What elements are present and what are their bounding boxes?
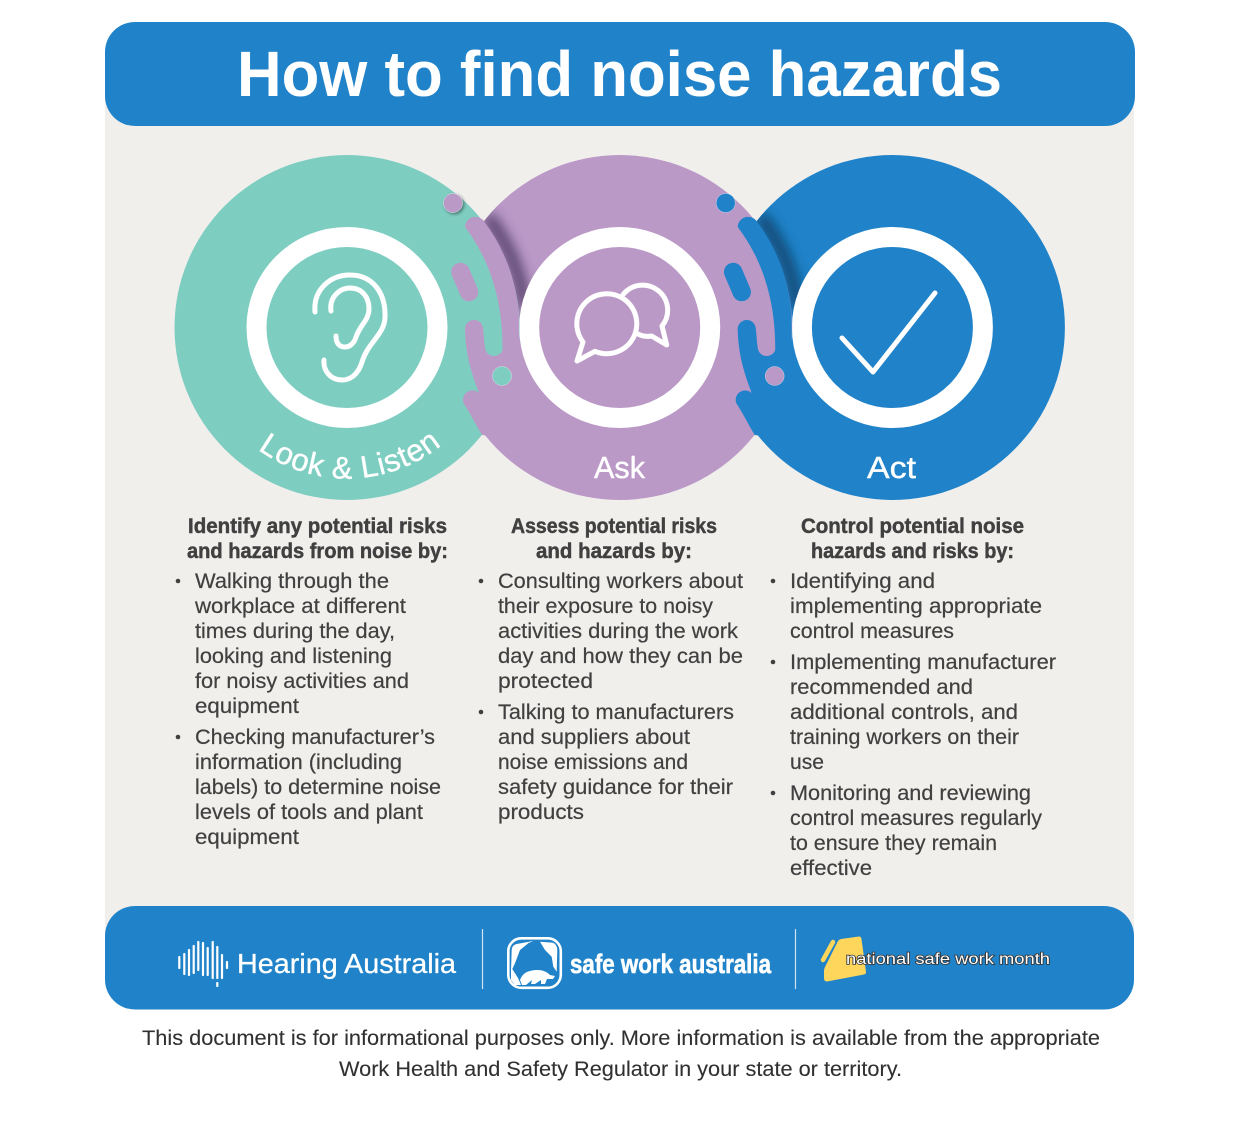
purple pill — [460, 272, 469, 292]
bullet: walking — [176, 570, 409, 718]
label: Ask: Ask — [594, 450, 645, 485]
teal dot — [492, 366, 512, 386]
bullet: walking: Walking through the — [195, 570, 389, 593]
bullet: talking: Talking to manufacturers — [498, 701, 734, 724]
panel: Act circle — [756, 155, 1065, 500]
blue fingers overlapping purple circle — [716, 194, 792, 440]
logo text: safe work australia: safe work australia — [570, 949, 772, 979]
footer logo bar — [105, 906, 1134, 1010]
bullet: identifying: control measures — [790, 620, 954, 643]
disclaimer text: This document is for informational purposes only. More information is available from the appropriate — [142, 1027, 1100, 1050]
bullet: checking: information (including — [195, 751, 402, 774]
icon: speech bubbles — [577, 285, 668, 361]
bullet: implementing: training workers on their — [790, 726, 1019, 749]
text block: Ask column — [479, 515, 743, 824]
heading: identify — [187, 515, 448, 563]
heading: assess — [511, 515, 717, 563]
disclaimer text — [142, 1027, 1100, 1081]
heading: control: hazards and risks by: — [811, 540, 1014, 563]
bullet: walking: looking and listening — [195, 645, 392, 668]
bullet: talking — [479, 701, 734, 824]
blue pill — [733, 272, 742, 292]
bullet: implementing: additional controls, and — [790, 701, 1018, 724]
bullet: implementing: use — [790, 751, 824, 774]
bullet: consulting: activities during the work — [498, 620, 739, 643]
icon: ear — [315, 275, 385, 380]
bullet: checking: Checking manufacturer’s — [195, 726, 435, 749]
blue dot — [716, 194, 735, 212]
bullet: implementing — [771, 651, 1056, 774]
bullet: consulting: protected — [498, 670, 593, 693]
panel: Look and Listen circle — [174, 155, 520, 500]
bullet: talking: noise emissions and — [498, 751, 688, 774]
bullet: identifying: Identifying and — [790, 570, 935, 593]
bullet: talking: safety guidance for their — [498, 776, 733, 799]
bullet: checking: labels) to determine noise — [195, 776, 441, 799]
bullet: implementing: Implementing manufacturer — [790, 651, 1056, 674]
heading: assess: Assess potential risks — [511, 515, 717, 538]
logo text: national safe work month: national safe work month — [846, 951, 1050, 968]
bullet: checking: equipment — [195, 826, 299, 849]
header banner — [105, 22, 1135, 126]
label: Look and Listen: Look & Listen — [260, 432, 440, 480]
bullet: monitoring: to ensure they remain — [790, 832, 997, 855]
disclaimer text: Work Health and Safety Regulator in your state or territory. — [339, 1058, 902, 1081]
bullet: identifying — [771, 570, 1042, 643]
bullet: consulting: Consulting workers about — [498, 570, 743, 593]
bullet: talking: and suppliers about — [498, 726, 690, 749]
icon: Hearing Australia waveform — [179, 942, 227, 986]
bullet: walking: times during the day, — [195, 620, 395, 643]
bullet: walking: workplace at different — [194, 595, 406, 618]
icon: check mark — [842, 293, 935, 372]
icon: National Safe Work Month mark — [823, 936, 866, 982]
bullet: monitoring: Monitoring and reviewing — [790, 782, 1031, 805]
bullet: consulting: day and how they can be — [498, 645, 743, 668]
purple dot — [444, 194, 462, 212]
bullet: implementing: recommended and — [790, 676, 973, 699]
heading: identify: and hazards from noise by: — [187, 540, 448, 563]
logo text: Hearing Australia: Hearing Australia — [237, 948, 456, 979]
bullet: talking: products — [498, 801, 584, 824]
bullet: checking — [176, 726, 441, 849]
bullet: consulting — [479, 570, 743, 693]
purple dot on blue — [765, 366, 784, 386]
panel: background card — [105, 70, 1134, 960]
bullet: identifying: implementing appropriate — [790, 595, 1042, 618]
purple fingers overlapping teal circle — [444, 194, 519, 440]
heading: assess: and hazards by: — [536, 540, 692, 563]
heading: control — [801, 515, 1024, 563]
bullet: monitoring: control measures regularly — [790, 807, 1043, 830]
bullet: consulting: their exposure to noisy — [498, 595, 713, 618]
bullet: walking: for noisy activities and — [195, 670, 409, 693]
bullet: monitoring: effective — [790, 857, 872, 880]
label: Act: Act — [867, 450, 916, 485]
bullet: monitoring — [771, 782, 1043, 880]
panel: Ask circle — [484, 155, 792, 500]
text block: Act column — [771, 515, 1056, 880]
bullet: walking: equipment — [195, 695, 299, 718]
text block: Look and Listen column — [176, 515, 448, 849]
heading: control: Control potential noise — [801, 515, 1024, 538]
bullet: checking: levels of tools and plant — [195, 801, 423, 824]
icon: Safe Work Australia crest — [508, 938, 561, 988]
heading: identify: Identify any potential risks — [188, 515, 447, 538]
title: How to find noise hazards — [237, 38, 1002, 110]
